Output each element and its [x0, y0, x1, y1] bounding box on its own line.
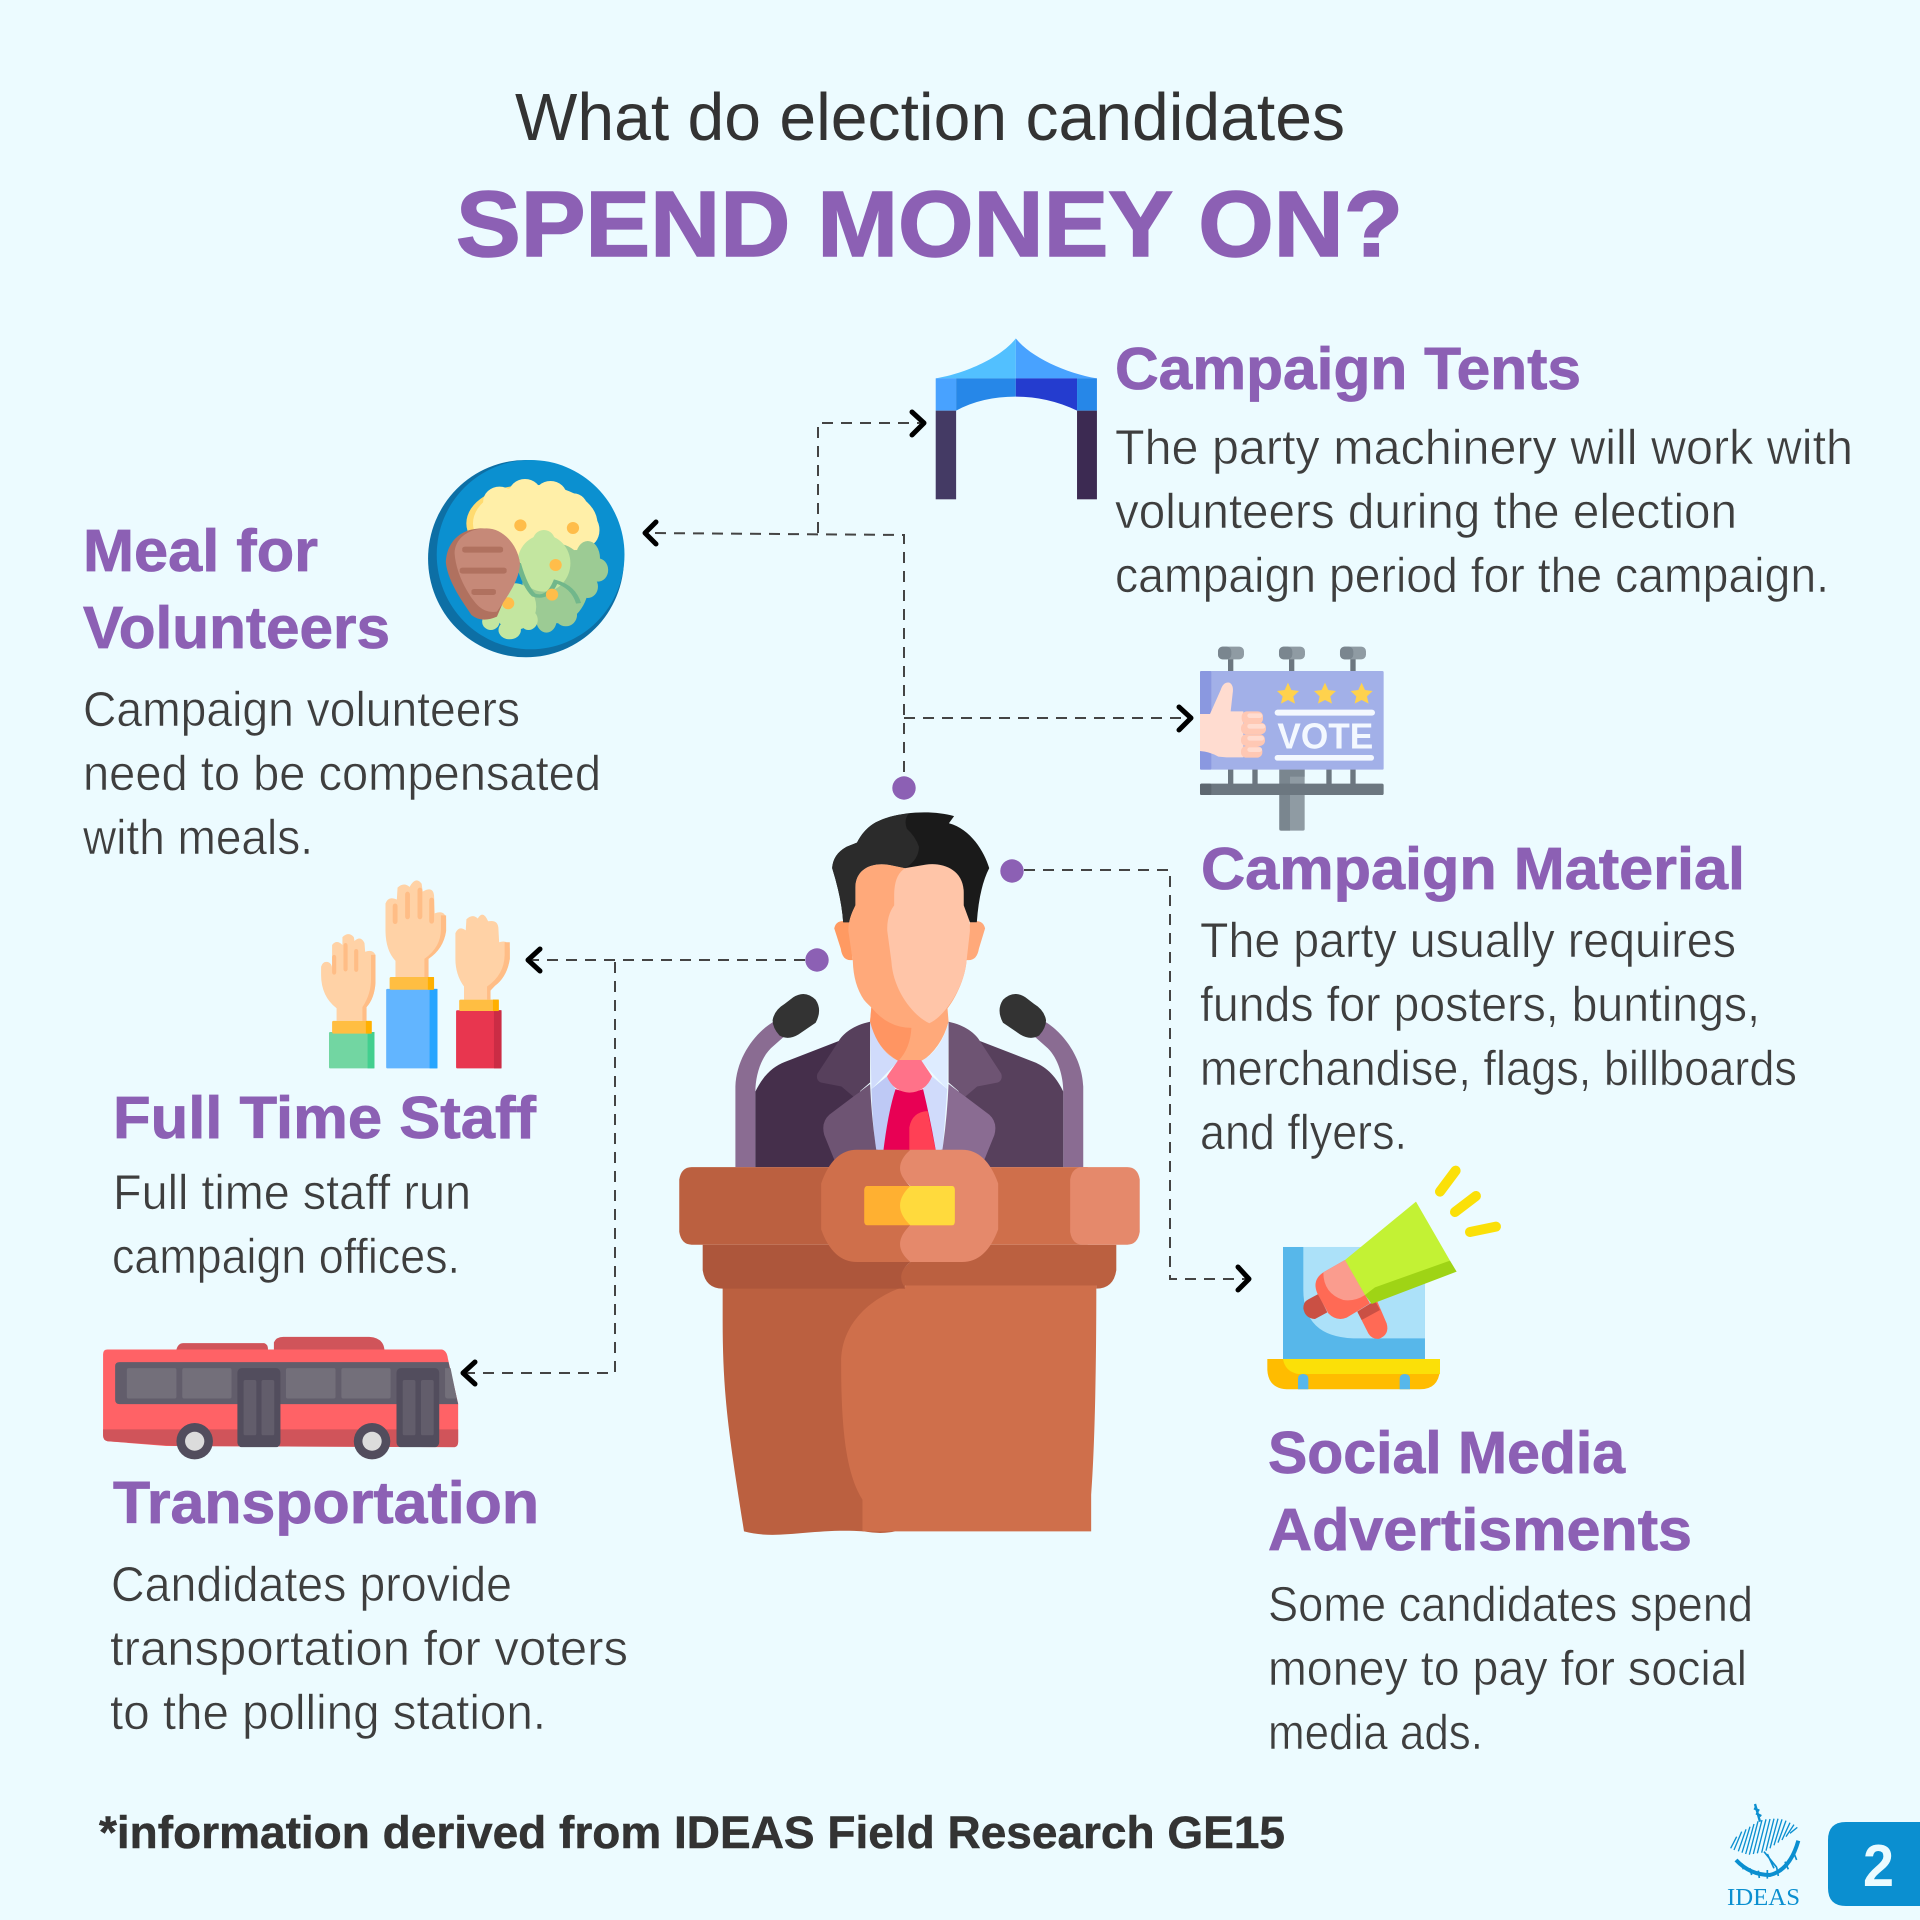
corn: [502, 519, 579, 609]
title line 1: What do election candidates: [515, 80, 1345, 155]
icon: campaign tent: [936, 338, 1097, 499]
thumb up hand: [1200, 683, 1266, 758]
icon: vote billboard: [1200, 647, 1384, 831]
heading and text: social media advertisments: media ads.: [1268, 1706, 1483, 1760]
heading and text: transportation: [110, 1470, 628, 1740]
heading and text: social media advertisments: Some candidates spend: [1268, 1578, 1753, 1632]
heading and text: social media advertisments: Advertisments: [1268, 1497, 1692, 1563]
bus doors: [237, 1368, 439, 1447]
heading and text: transportation: Transportation: [113, 1470, 539, 1536]
connector dot: right: [1000, 859, 1024, 883]
logo: IDEAS: [1727, 1804, 1800, 1911]
bus windows: [115, 1362, 458, 1404]
bars: [1275, 710, 1375, 716]
heading and text: social media advertisments: money to pay for social: [1268, 1642, 1747, 1696]
laptop: [1267, 1247, 1440, 1389]
title: [456, 80, 1403, 276]
heading and text: full time staff: Full Time Staff: [113, 1085, 536, 1151]
podium emblem: [821, 1150, 998, 1262]
speaker at podium illustration: [679, 812, 1140, 1535]
lettuce: [482, 530, 608, 639]
arrow: to transport: [463, 1362, 475, 1384]
heading and text: campaign material: merchandise, flags, billboards: [1200, 1042, 1797, 1096]
suit and shirt: [755, 1005, 1063, 1167]
megaphone: [1303, 1202, 1457, 1339]
heading and text: full time staff: campaign offices.: [112, 1230, 460, 1284]
page number badge: 2: [1863, 1833, 1894, 1899]
icon: social media megaphone: [1267, 1171, 1496, 1389]
logo bird mark: [1731, 1804, 1798, 1879]
heading and text: campaign material: [1200, 836, 1797, 1160]
icon: raised hands: [321, 880, 510, 1068]
heading and text: meal for volunteers: Campaign volunteers: [83, 683, 520, 737]
heading and text: meal for volunteers: Meal for: [83, 518, 318, 584]
heading and text: transportation: to the polling station.: [110, 1686, 546, 1740]
heading and text: campaign tents: The party machinery will work with: [1115, 421, 1853, 475]
heading and text: campaign tents: campaign period for the campaign.: [1115, 549, 1829, 603]
sound rays: [1440, 1171, 1496, 1232]
heading and text: campaign material: Campaign Material: [1201, 836, 1745, 902]
heading and text: meal for volunteers: need to be compensated: [83, 747, 601, 801]
arrow: to material: [1179, 707, 1191, 730]
arrow: to meal: [645, 522, 656, 544]
heading and text: campaign material: The party usually requires: [1200, 914, 1736, 968]
connector lines: [466, 423, 1248, 1373]
heading and text: full time staff: Full time staff run: [113, 1166, 471, 1220]
head: [834, 864, 985, 1026]
heading and text: meal for volunteers: Volunteers: [83, 595, 390, 661]
page number badge: [1828, 1822, 1920, 1906]
arrow: to staff: [528, 949, 540, 971]
icon: bus: [103, 1337, 458, 1459]
meat: [446, 528, 520, 620]
footnote: *information derived from IDEAS Field Research GE15: [99, 1807, 1285, 1858]
billboard posts: [1200, 647, 1384, 831]
title line 2: SPEND MONEY ON?: [456, 172, 1403, 276]
arrow: to social media: [1238, 1267, 1249, 1290]
heading and text: transportation: transportation for voters: [110, 1622, 628, 1676]
heading and text: meal for volunteers: with meals.: [82, 811, 313, 865]
connector dot: left: [805, 948, 829, 972]
hand two: [385, 880, 446, 1068]
heading and text: social media advertisments: [1268, 1420, 1753, 1760]
hand one: [321, 934, 375, 1068]
heading and text: campaign tents: volunteers during the election: [1115, 485, 1737, 539]
podium body: [679, 1167, 1140, 1535]
billboard panel: [1200, 671, 1384, 770]
rice: [466, 479, 599, 562]
hand three: [455, 915, 510, 1068]
logo wordmark: IDEAS: [1727, 1885, 1800, 1911]
heading and text: campaign tents: [1115, 336, 1853, 603]
heading and text: campaign material: and flyers.: [1200, 1106, 1407, 1160]
hair: [832, 812, 989, 922]
heading and text: transportation: Candidates provide: [111, 1558, 512, 1612]
connector dot: top: [892, 776, 916, 800]
heading and text: full time staff: [112, 1085, 536, 1284]
heading and text: campaign material: funds for posters, buntings,: [1200, 978, 1760, 1032]
heading and text: social media advertisments: Social Media: [1268, 1420, 1626, 1486]
stars: [1277, 683, 1373, 704]
microphones: [735, 994, 1083, 1167]
heading and text: campaign tents: Campaign Tents: [1115, 336, 1581, 402]
bus wheels: [176, 1423, 390, 1459]
icon: meal plate: [428, 460, 624, 657]
heading and text: meal for volunteers: [82, 518, 601, 865]
arrow: to tent: [912, 412, 924, 435]
vote word: VOTE: [1277, 716, 1373, 757]
